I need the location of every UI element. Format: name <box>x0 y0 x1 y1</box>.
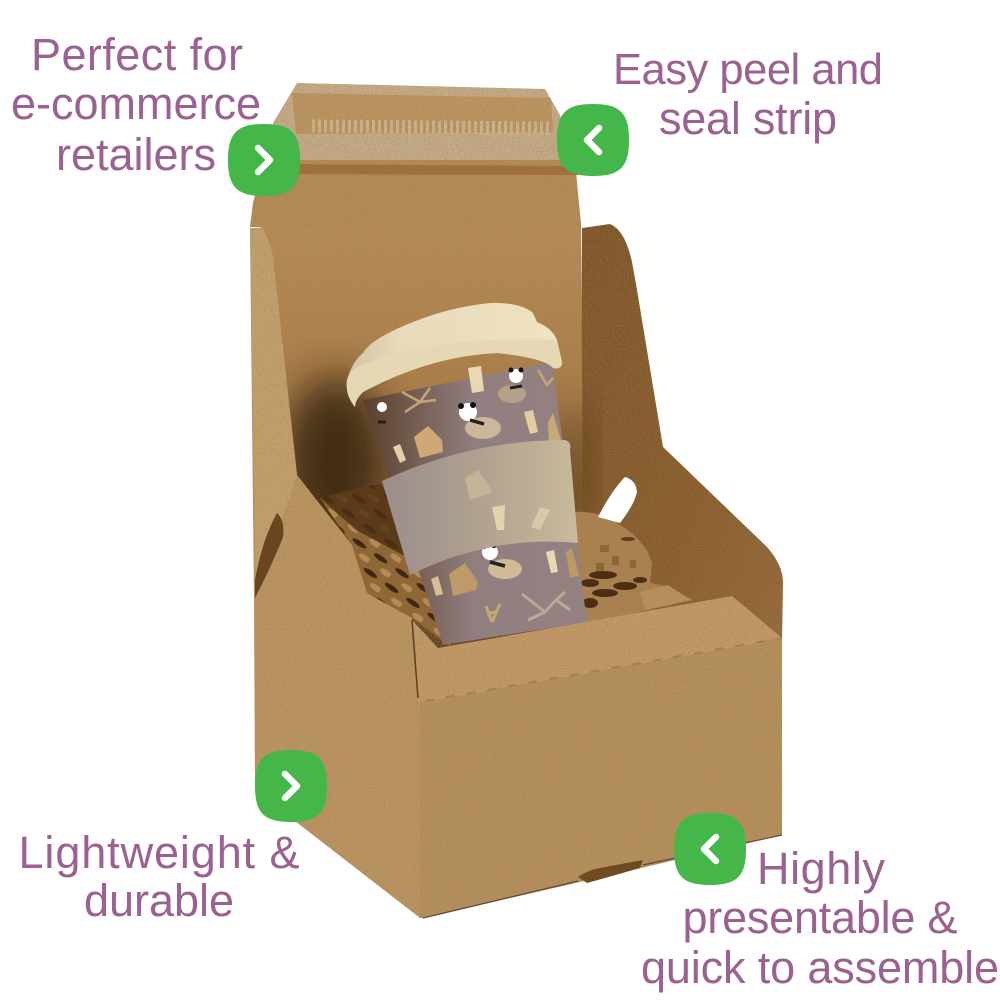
icon: left chevron button top right <box>557 104 629 176</box>
perforated edge <box>425 638 782 701</box>
cardboard box <box>250 83 783 918</box>
coffee cup <box>347 303 587 645</box>
label: Lightweight and durable: durable <box>84 875 234 926</box>
left flap upper <box>250 228 297 595</box>
bottom tab <box>578 860 643 883</box>
label: Lightweight and durable: Lightweight & <box>18 827 300 878</box>
label: Highly presentable and quick to assemble: presentable & <box>682 892 958 943</box>
front face <box>420 638 782 918</box>
icon: handle hole right <box>598 477 637 523</box>
adhesive strip band <box>292 93 553 134</box>
right inner wall <box>580 224 783 660</box>
interior shadow left <box>285 375 385 535</box>
cup lid <box>347 303 562 407</box>
label: Perfect for e-commerce retailers: e-commerce <box>11 78 261 129</box>
perforated teeth on strip <box>312 126 550 128</box>
label: Perfect for e-commerce retailers: Perfect for <box>31 29 243 80</box>
label: Easy peel and seal strip: Easy peel and <box>613 46 883 94</box>
interior shadow right <box>558 400 586 540</box>
kraft upper flap <box>250 150 581 227</box>
bottom edge <box>423 835 782 918</box>
left wall <box>250 228 420 918</box>
cup body <box>363 362 587 645</box>
lip slit <box>412 620 418 698</box>
label: Highly presentable and quick to assemble: Highly <box>757 843 886 894</box>
label: Highly presentable and quick to assemble: quick to assemble <box>641 942 999 993</box>
icon: handle hole left <box>255 513 283 598</box>
paper right <box>572 512 693 625</box>
cup decorations <box>377 366 579 622</box>
label: Easy peel and seal strip: seal strip <box>659 93 837 144</box>
icon: right chevron button bottom left <box>255 750 327 822</box>
icon: left chevron button bottom right <box>674 813 746 885</box>
paper filling <box>320 483 693 648</box>
paper left <box>320 483 452 648</box>
cup sleeve <box>382 440 578 575</box>
icon: right chevron button top left <box>228 124 300 196</box>
tear strip line <box>268 164 578 175</box>
inner front lip <box>412 596 782 702</box>
back panel with lid flap <box>250 222 584 660</box>
peel and seal strip <box>270 83 574 160</box>
label: Perfect for e-commerce retailers: retailers <box>56 129 216 180</box>
